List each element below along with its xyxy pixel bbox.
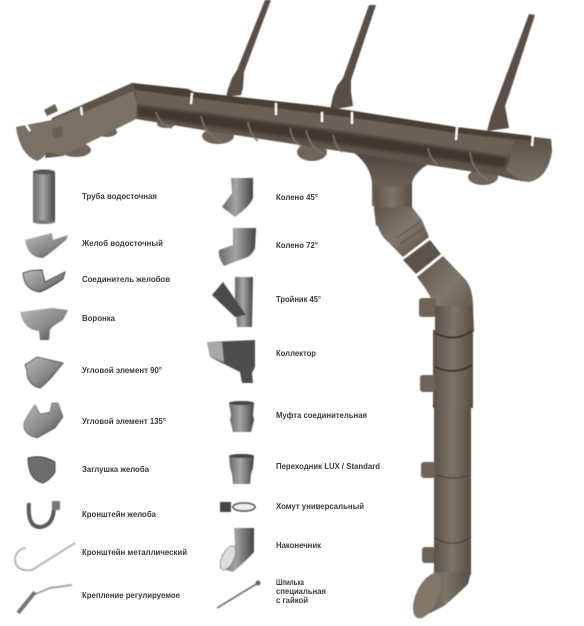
gutter body — [45, 83, 552, 182]
label: Хомут универсальный — [276, 502, 364, 511]
ribs on bend — [396, 222, 424, 244]
left gutter end cap — [16, 120, 53, 161]
downpipe nozzle — [420, 572, 471, 618]
icon: nozzle — [217, 528, 254, 572]
label: Воронка — [82, 314, 116, 323]
label: Желоб водосточный — [81, 239, 163, 248]
pipe collar — [372, 183, 412, 226]
nozzle opening — [407, 570, 447, 622]
label: Коллектор — [276, 349, 316, 358]
dark band notches — [433, 331, 472, 412]
icon: elbow 45 — [222, 178, 253, 217]
wall clip 3 — [421, 462, 435, 478]
label: threaded stud: Шпилька — [276, 578, 304, 587]
roof hanger 3 — [487, 14, 535, 131]
label: Угловой элемент 90° — [82, 366, 162, 375]
icon: corner 90 — [25, 357, 63, 388]
gutter face: lighter upper strip — [136, 89, 515, 156]
parts icons — [15, 170, 260, 613]
label: Крепление регулируемое — [82, 591, 181, 600]
label: Труба водосточная — [82, 192, 157, 201]
wall clip 1 — [419, 298, 436, 317]
icon: threaded stud — [217, 580, 260, 608]
icon: gutter end cap — [28, 457, 55, 483]
gutter shading: soft dark band — [137, 106, 508, 168]
label: Кронштейн металлический — [82, 548, 187, 557]
collar band — [435, 306, 474, 332]
icon: pipe — [33, 170, 55, 224]
label: Угловой элемент 135° — [82, 417, 166, 426]
icon: gutter connector — [23, 270, 65, 292]
right gutter end cap — [506, 139, 552, 182]
icon: gutter bracket — [29, 501, 60, 527]
label: Колено 45° — [276, 193, 318, 202]
icon: clamp — [220, 502, 255, 512]
lower pipe bend — [417, 256, 473, 330]
icon: adapter — [229, 454, 254, 484]
icon: coupling — [229, 401, 254, 432]
icon: corner 135 — [24, 403, 63, 438]
part labels — [81, 192, 380, 605]
roof hanger 1 — [226, 0, 271, 97]
vertical pipe upper — [433, 330, 473, 408]
roof hanger 2 — [330, 5, 376, 110]
label: Наконечник — [276, 541, 322, 550]
label: threaded stud: специальная — [276, 587, 326, 596]
left gutter section rim — [80, 83, 136, 112]
pipe middle segment — [403, 240, 441, 274]
label: Кронштейн желоба — [82, 510, 157, 519]
label: Тройник 45° — [276, 295, 321, 304]
icon: tee 45 — [212, 277, 253, 327]
label: Заглушка желоба — [82, 465, 150, 474]
label: Переходник LUX / Standard — [276, 462, 380, 471]
gutter shading: top rim — [132, 83, 533, 141]
wall clip 2 — [420, 375, 435, 392]
white gutter joint slits — [25, 93, 533, 146]
rainwater funnel and upper pipe — [350, 150, 436, 206]
icon: gutter — [25, 233, 68, 258]
label: Соединитель желобов — [82, 275, 170, 284]
icon: elbow 72 — [219, 228, 256, 266]
icon: collector — [207, 340, 255, 383]
icon: funnel — [20, 308, 68, 340]
bracket lines on gutter — [112, 110, 488, 180]
icon: metal bracket — [15, 543, 75, 570]
label: Муфта соединительная — [276, 411, 367, 420]
lower collar — [434, 535, 471, 575]
upper pipe bend — [374, 207, 429, 257]
wall clip 4 — [422, 547, 436, 563]
label: threaded stud: с гайкой — [276, 596, 308, 605]
vertical pipe lower — [434, 405, 471, 545]
label: Колено 72° — [276, 241, 318, 250]
left gutter clips — [44, 104, 63, 139]
label: threaded stud — [276, 578, 326, 605]
collar shadow — [434, 475, 471, 543]
downpipe — [372, 183, 474, 622]
left gutter section light surface — [47, 87, 137, 156]
icon: adjustable fastener — [18, 585, 72, 613]
hanging bracket lumps — [61, 120, 498, 185]
